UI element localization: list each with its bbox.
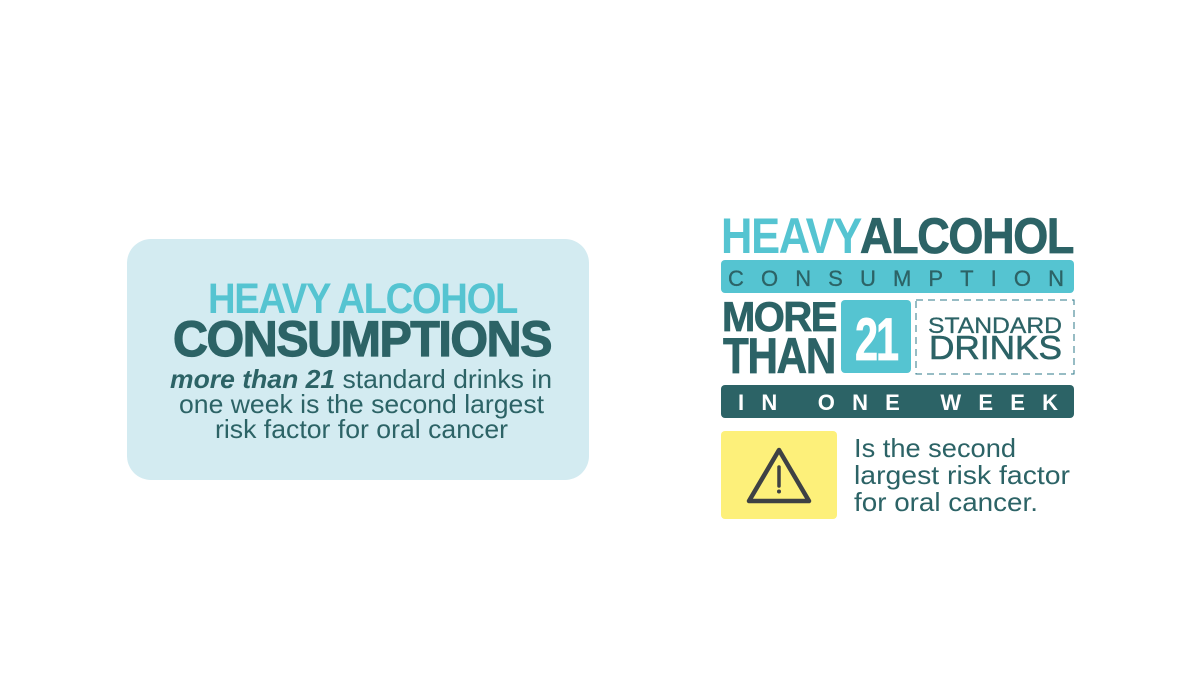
text block: summary sentence: risk factor for oral cancer <box>215 414 508 444</box>
banner: in one week: IN ONE WEEK <box>738 390 1058 415</box>
heading: heavy alcohol: HEAVY ALCOHOL <box>208 275 517 323</box>
text block: risk factor statement <box>854 433 1070 517</box>
panel: left summary card <box>127 239 589 480</box>
dashed box: standard drinks: DRINKS <box>929 329 1062 366</box>
badge: 21 <box>841 300 911 373</box>
heading: alcohol: ALCOHOL <box>860 208 1073 264</box>
panel: right typographic graphic <box>721 208 1074 519</box>
icon: warning triangle on yellow <box>721 431 837 519</box>
text block: summary sentence <box>170 364 552 444</box>
text: more than: THAN <box>723 328 835 384</box>
text: more than: MORE <box>722 293 836 340</box>
badge: 21: 21 <box>855 306 898 373</box>
heading: heavy: HEAVY <box>721 208 862 264</box>
text block: summary sentence: one week is the second largest <box>179 389 545 419</box>
text: more than <box>722 293 836 384</box>
dashed box: standard drinks <box>916 300 1074 374</box>
text block: summary sentence: more than 21 standard drinks in <box>170 364 552 394</box>
heading: consumptions: CONSUMPTIONS <box>173 311 551 367</box>
banner: in one week <box>721 385 1074 418</box>
text block: risk factor statement: largest risk factor <box>854 460 1070 490</box>
text block: risk factor statement: for oral cancer. <box>854 487 1038 517</box>
dashed box: standard drinks: STANDARD <box>928 313 1062 338</box>
text block: risk factor statement: Is the second <box>854 433 1016 463</box>
banner: consumption: CONSUMPTION <box>728 266 1064 291</box>
